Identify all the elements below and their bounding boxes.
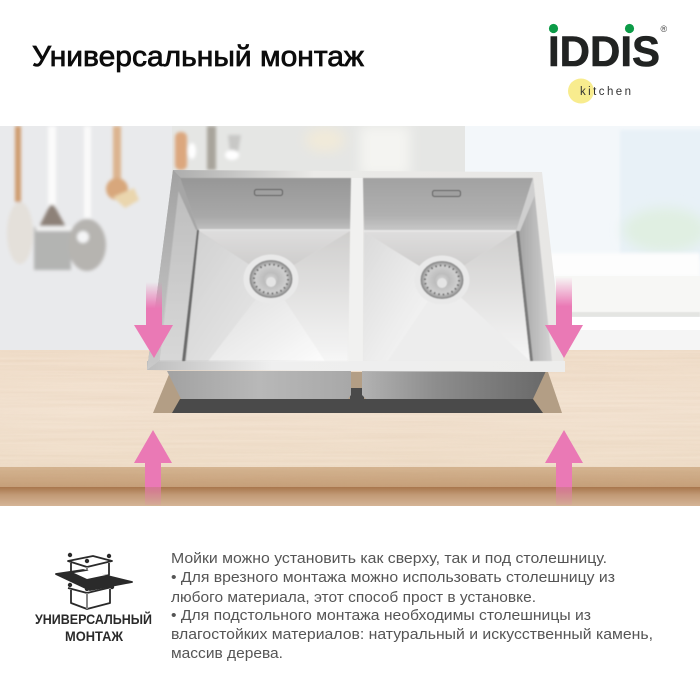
description text: • Для подстольного монтажа необходимы столешницы из — [171, 607, 591, 624]
description text — [171, 550, 653, 662]
right bowl — [363, 178, 552, 361]
logo wordmark: IDDIS — [548, 28, 660, 76]
drain — [244, 254, 298, 298]
floor panels — [366, 232, 514, 266]
back wall — [180, 178, 351, 230]
mounting pins — [68, 553, 114, 591]
worktop slab — [56, 570, 132, 590]
icon caption: УНИВЕРСАЛЬНЫЙ — [35, 612, 152, 627]
worktop lower shadow — [0, 487, 700, 507]
description text: любого материала, этот способ прост в установке. — [171, 589, 536, 606]
worktop front edge — [0, 467, 700, 487]
overflow slot — [432, 190, 460, 196]
back wall — [363, 178, 533, 231]
logo dot right — [625, 24, 634, 33]
wooden worktop — [0, 350, 700, 507]
arrow: bottom left — [134, 430, 172, 505]
icon caption: МОНТАЖ — [65, 629, 124, 644]
photo: sink on worktop — [0, 126, 700, 507]
cutout in worktop — [153, 372, 562, 413]
description text: влагостойких материалов: натуральный и искусственный камень, — [171, 626, 653, 643]
floor panels — [199, 230, 348, 265]
registered mark: ® — [660, 24, 668, 34]
yellow blob — [568, 78, 594, 104]
left wall — [159, 178, 198, 361]
overflow slot — [254, 190, 282, 196]
description text: • Для врезного монтажа можно использовать столешницу из — [171, 569, 615, 586]
logo dot left — [549, 24, 558, 33]
kitchen background — [0, 126, 700, 352]
description text: массив дерева. — [171, 645, 283, 662]
arrow: top left — [134, 282, 173, 358]
upper box — [68, 556, 112, 581]
kitchen wordmark: kitchen — [580, 86, 631, 98]
drain — [420, 256, 470, 300]
logo: IDDIS kitchen — [548, 24, 668, 103]
left bowl — [159, 178, 351, 361]
right wall — [518, 196, 552, 362]
sink rim — [147, 170, 565, 372]
blurred utensils — [7, 126, 241, 271]
description text: Мойки можно установить как сверху, так и под столешницу. — [171, 550, 607, 567]
bowl undersides — [167, 371, 546, 399]
arrow: top right — [545, 277, 583, 358]
title: Универсальный монтаж — [32, 41, 365, 73]
arrow: bottom right — [545, 430, 583, 505]
icon: universal mounting — [56, 553, 132, 609]
lower box — [68, 587, 112, 609]
